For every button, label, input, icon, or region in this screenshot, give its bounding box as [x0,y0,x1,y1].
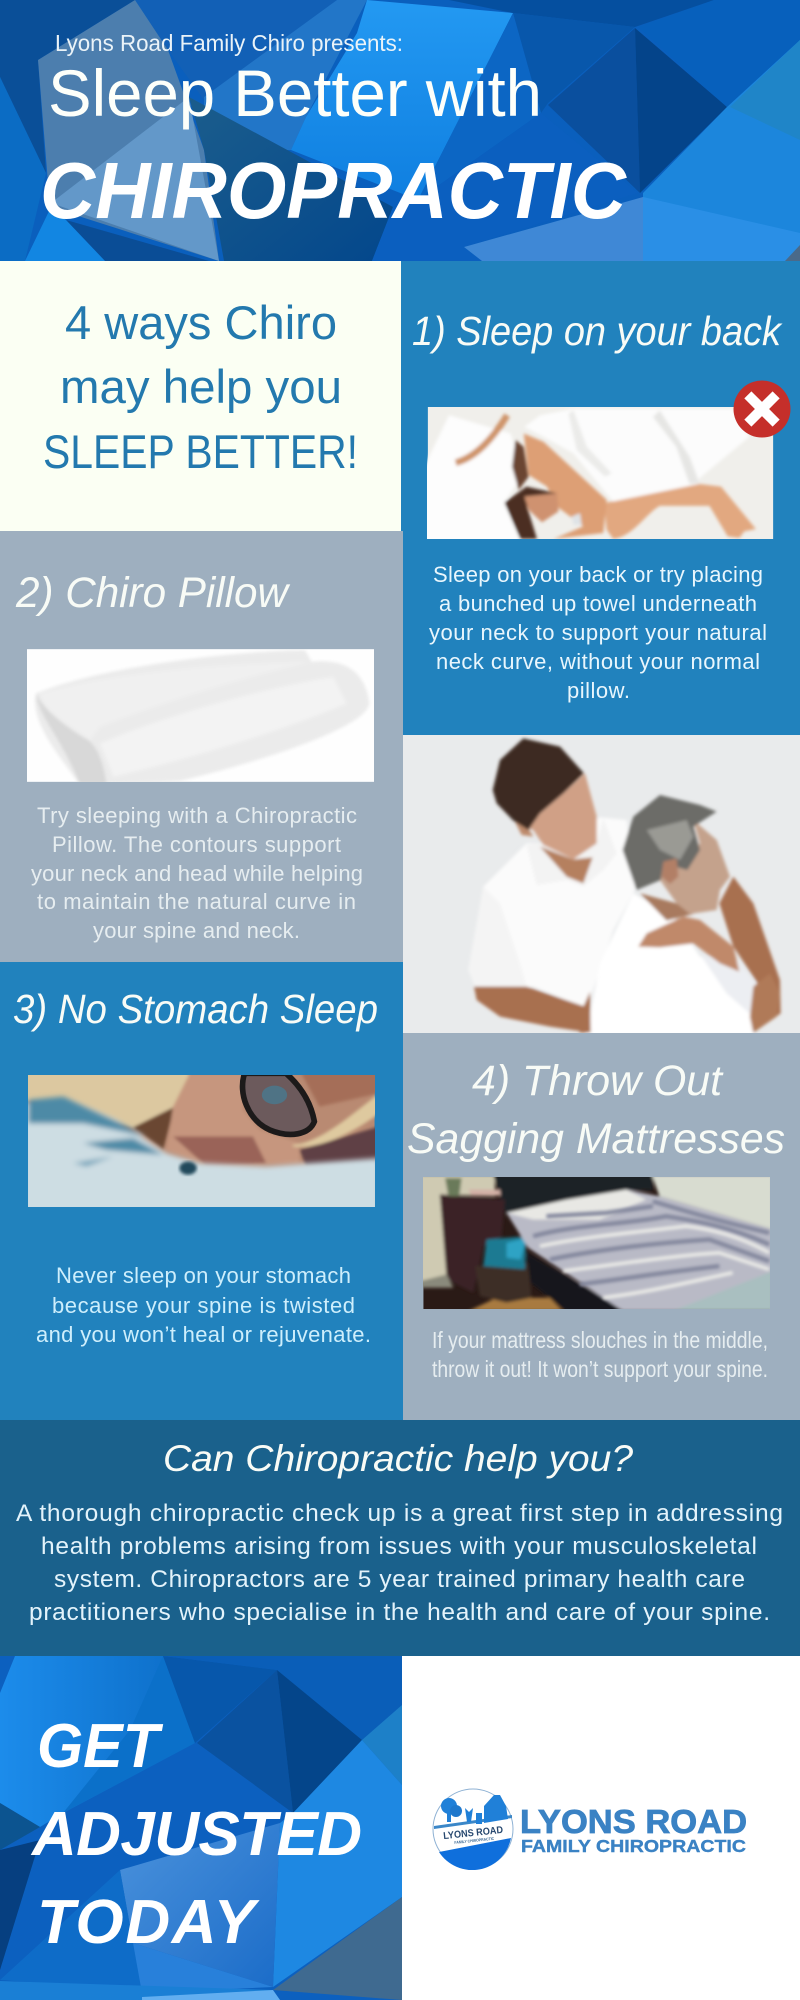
panel: 3 no stomach sleep [0,962,403,1420]
text: 1 description: a bunched up towel underneath [439,591,757,616]
logo wordmark: FAMILY CHIROPRACTIC [521,1836,746,1856]
panel: 1 sleep on your back [401,261,800,735]
panel: intro [0,261,401,531]
logo mark: LYONS ROAD [443,1825,504,1842]
panel: header background [0,0,800,261]
panel: 4 throw out sagging mattresses [403,1033,800,1420]
title: CHIROPRACTIC: CHIROPRACTIC [40,146,627,235]
heading: 4: 4) Throw Out [472,1057,724,1105]
panel: can chiropractic help you [0,1420,800,1656]
text: 3 description: and you won’t heal or rejuvenate. [36,1322,371,1347]
text: check up description: system. Chiropractors are 5 year trained primary health care [54,1566,745,1593]
heading: 3: 3) No Stomach Sleep [13,986,378,1032]
text: 2 description: to maintain the natural curve in [37,889,356,914]
text: 3 description: because your spine is twisted [52,1293,355,1318]
heading: 4: Sagging Mattresses [407,1115,785,1163]
text: 2 description: your neck and head while helping [31,861,363,886]
logo mark: FAMILY CHIROPRACTIC [454,1836,494,1845]
logo wordmark: LYONS ROAD [520,1803,747,1840]
text: check up description: practitioners who specialise in the health and care of your spine. [29,1599,770,1626]
logo: Lyons Road Family Chiropractic [433,1789,747,1870]
text: 1 description: your neck to support your natural [429,620,767,645]
text: 1 description: neck curve, without your normal [436,649,760,674]
photo: chiropractor adjusting patient [403,735,800,1033]
text: call to action: GET [37,1712,164,1781]
text: call to action: TODAY [37,1888,261,1957]
heading: 4 ways: 4 ways Chiro [65,296,337,349]
heading: 1: 1) Sleep on your back [412,308,783,354]
photo: contoured pillow [27,649,374,782]
text: call to action: ADJUSTED [30,1800,362,1869]
text: 1 description: pillow. [567,678,630,703]
logo wordmark [520,1803,747,1856]
text: 2 description: your spine and neck. [93,918,300,943]
text: 1 description [429,562,767,703]
photo: unmade bed [423,1177,770,1309]
text: call to action [30,1712,362,1957]
icon: red cross [734,380,790,438]
title: Sleep Better with: Sleep Better with [48,56,542,130]
title: presenter line: Lyons Road Family Chiro presents: [55,30,403,56]
text: check up description: A thorough chiropractic check up is a great first step in addressing [16,1500,783,1527]
heading: can chiropractic help: Can Chiropractic help you? [163,1438,633,1479]
text: 2 description: Try sleeping with a Chiropractic [37,803,357,828]
text: 3 description [36,1263,371,1347]
text: 2 description [31,803,363,943]
heading: 4 [407,1057,785,1163]
text: 1 description: Sleep on your back or try placing [433,562,763,587]
heading: 4 ways: SLEEP BETTER! [43,425,358,478]
text: 3 description: Never sleep on your stomach [56,1263,351,1288]
text: 4 description [432,1327,768,1382]
logo mark [432,1788,514,1870]
photo: woman with glasses under blanket [28,1075,375,1207]
panel: 2 chiro pillow [0,531,403,962]
panel: get adjusted today [0,1656,402,2000]
heading: 4 ways: may help you [60,360,342,413]
heading: 2: 2) Chiro Pillow [15,569,291,617]
photo: woman curled up in bed [427,407,774,539]
text: 2 description: Pillow. The contours support [52,832,341,857]
heading: 4 ways [43,296,358,478]
text: check up description: health problems arising from issues with your musculoskeletal [41,1533,757,1560]
text: check up description [16,1500,783,1626]
